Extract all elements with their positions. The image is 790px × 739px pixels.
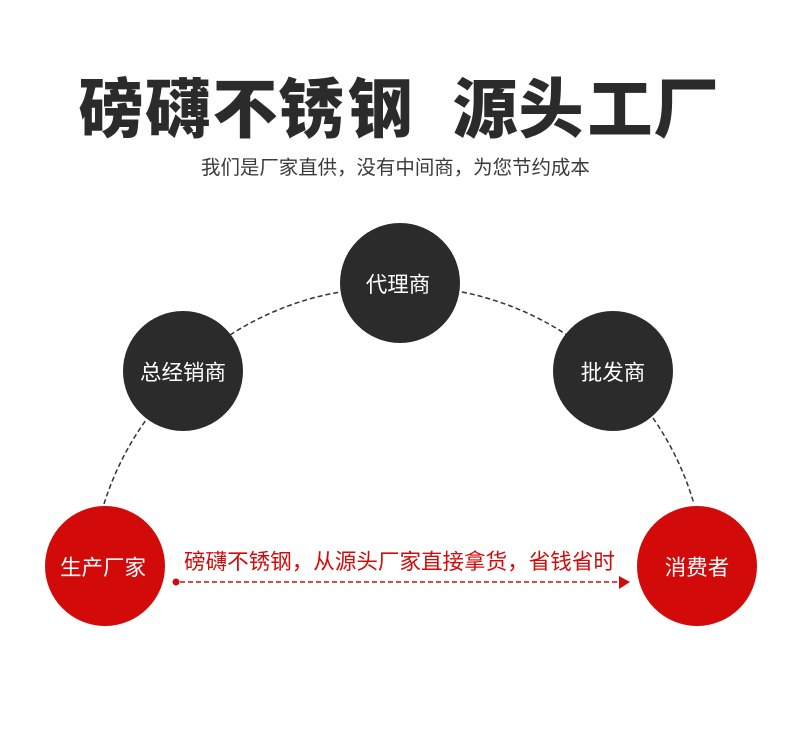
dashed arc: left upper [230, 292, 340, 335]
title: 不 [212, 73, 278, 146]
title: 礴 [145, 73, 211, 146]
node: 消费者: 消费者 [665, 556, 729, 580]
node: 代理商: 代理商 [366, 273, 430, 297]
dashed arc: right lower [653, 418, 694, 504]
node: 总经销商 [123, 311, 243, 431]
title: 锈 [278, 73, 344, 146]
direct route caption: 磅礴不锈钢，从源头厂家直接拿货，省钱省时 [184, 549, 615, 574]
arrow: direct route [172, 576, 630, 589]
dashed arc: right upper [462, 292, 567, 335]
node: 生产厂家: 生产厂家 [60, 556, 146, 580]
title: 源 [452, 73, 518, 146]
title: 工 [587, 73, 653, 146]
title: 磅 [78, 73, 144, 146]
title: 钢 [347, 73, 413, 146]
title: 头 [518, 73, 584, 146]
node: 生产厂家 [45, 506, 165, 626]
node: 消费者 [637, 506, 757, 626]
dashed arc: left lower [104, 420, 146, 504]
node: 批发商: 批发商 [581, 361, 645, 385]
node: 代理商 [340, 223, 460, 343]
title [78, 73, 719, 146]
subtitle: 我们是厂家直供，没有中间商，为您节约成本 [201, 157, 590, 179]
node: 总经销商: 总经销商 [140, 361, 226, 385]
title: 厂 [653, 73, 719, 146]
node: 批发商 [553, 311, 673, 431]
